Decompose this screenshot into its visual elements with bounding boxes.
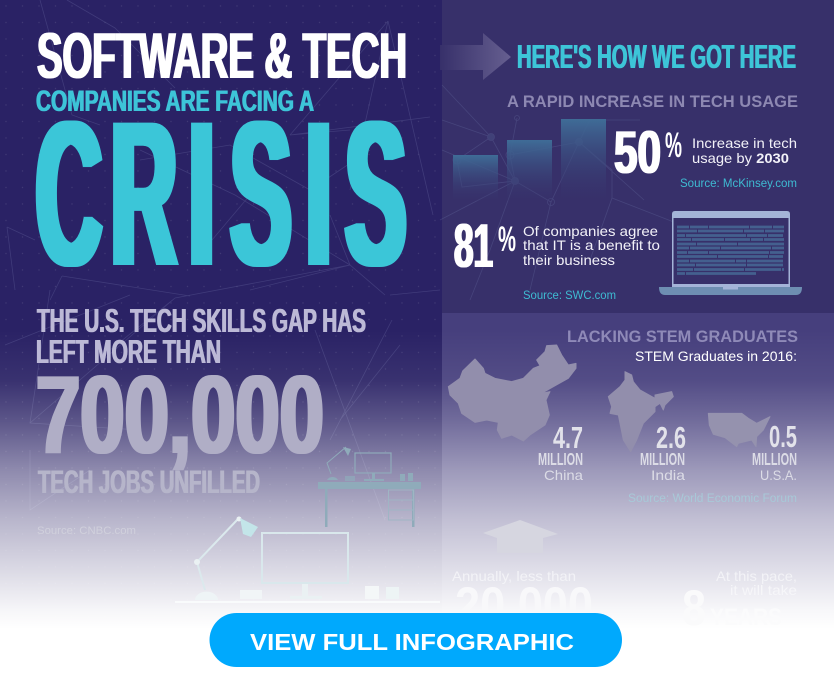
stat: 81 percent: Of companies agree xyxy=(523,223,658,239)
stat: China xyxy=(538,420,583,483)
skills gap statistic: Source: CNBC.com xyxy=(37,525,136,537)
illustration: small desk xyxy=(318,447,421,527)
icon: laptop xyxy=(659,211,802,295)
stat: annual graduates: 20,000 xyxy=(455,577,593,633)
illustration: large desk xyxy=(175,516,440,603)
stat: India: India xyxy=(651,467,685,483)
bar chart xyxy=(453,119,606,201)
stat: 50 percent: usage by 2030 xyxy=(692,150,789,166)
stat: 50 percent xyxy=(614,119,797,190)
map: China xyxy=(448,345,576,441)
stat: years to close gap: it will take xyxy=(730,582,797,598)
map: USA xyxy=(708,413,770,447)
title: SOFTWARE & TECH xyxy=(37,19,407,92)
stat: years to close gap: YEARS xyxy=(710,604,782,631)
stat: years to close gap: 8 xyxy=(682,580,706,636)
heading: lacking stem graduates xyxy=(567,327,798,364)
icon: graduation cap xyxy=(483,520,558,553)
stat: years to close gap: At this pace, xyxy=(716,568,797,584)
heading: rapid increase: A RAPID INCREASE IN TECH USAGE xyxy=(507,92,798,111)
stat: 81 percent: that IT is a benefit to xyxy=(523,237,660,253)
network lines, right xyxy=(440,85,720,300)
stat: 81 percent: % xyxy=(498,220,516,259)
stat: USA: MILLION xyxy=(752,449,797,469)
stat: USA xyxy=(752,419,797,483)
heading: lacking stem graduates: STEM Graduates in 2016: xyxy=(635,349,797,364)
stat: 50 percent: Source: McKinsey.com xyxy=(680,178,797,190)
skills gap statistic: 700,000 xyxy=(36,353,324,477)
stat: 81 percent: Source: SWC.com xyxy=(523,290,616,302)
button: view full infographic xyxy=(210,613,622,667)
stat: India: 2.6 xyxy=(656,420,686,455)
skills gap statistic: LEFT MORE THAN xyxy=(36,333,221,370)
stat: 81 percent: 81 xyxy=(454,212,493,281)
heading: lacking stem graduates: LACKING STEM GRADUATES xyxy=(567,327,798,346)
stat: 81 percent xyxy=(454,212,660,302)
stat: China: China xyxy=(544,467,583,483)
stat: China: 4.7 xyxy=(553,420,583,455)
stat: 50 percent: Increase in tech xyxy=(692,135,797,151)
title: CRISIS xyxy=(36,77,406,309)
button: view full infographic: VIEW FULL INFOGRAPHIC xyxy=(250,629,574,655)
map: India xyxy=(608,372,673,452)
stat: 81 percent: their business xyxy=(523,252,615,268)
stat: India: MILLION xyxy=(640,449,685,469)
skills gap statistic: TECH JOBS UNFILLED xyxy=(38,464,260,500)
source: world economic forum: Source: World Economic Forum xyxy=(628,493,797,505)
stat: annual graduates: Annually, less than xyxy=(452,568,576,584)
stat: India xyxy=(640,420,686,483)
stat: USA: 0.5 xyxy=(769,419,797,454)
stat: China: MILLION xyxy=(538,449,583,469)
skills gap statistic: THE U.S. TECH SKILLS GAP HAS xyxy=(37,302,366,339)
stat: years to close gap xyxy=(682,568,797,636)
stat: USA: U.S.A. xyxy=(760,467,797,483)
skills gap statistic xyxy=(36,302,366,537)
stat: 50 percent: 50 xyxy=(614,119,661,186)
stat: 50 percent: % xyxy=(665,126,682,165)
network lines, left xyxy=(5,0,440,520)
title: COMPANIES ARE FACING A xyxy=(36,85,314,118)
arrow xyxy=(440,33,511,80)
